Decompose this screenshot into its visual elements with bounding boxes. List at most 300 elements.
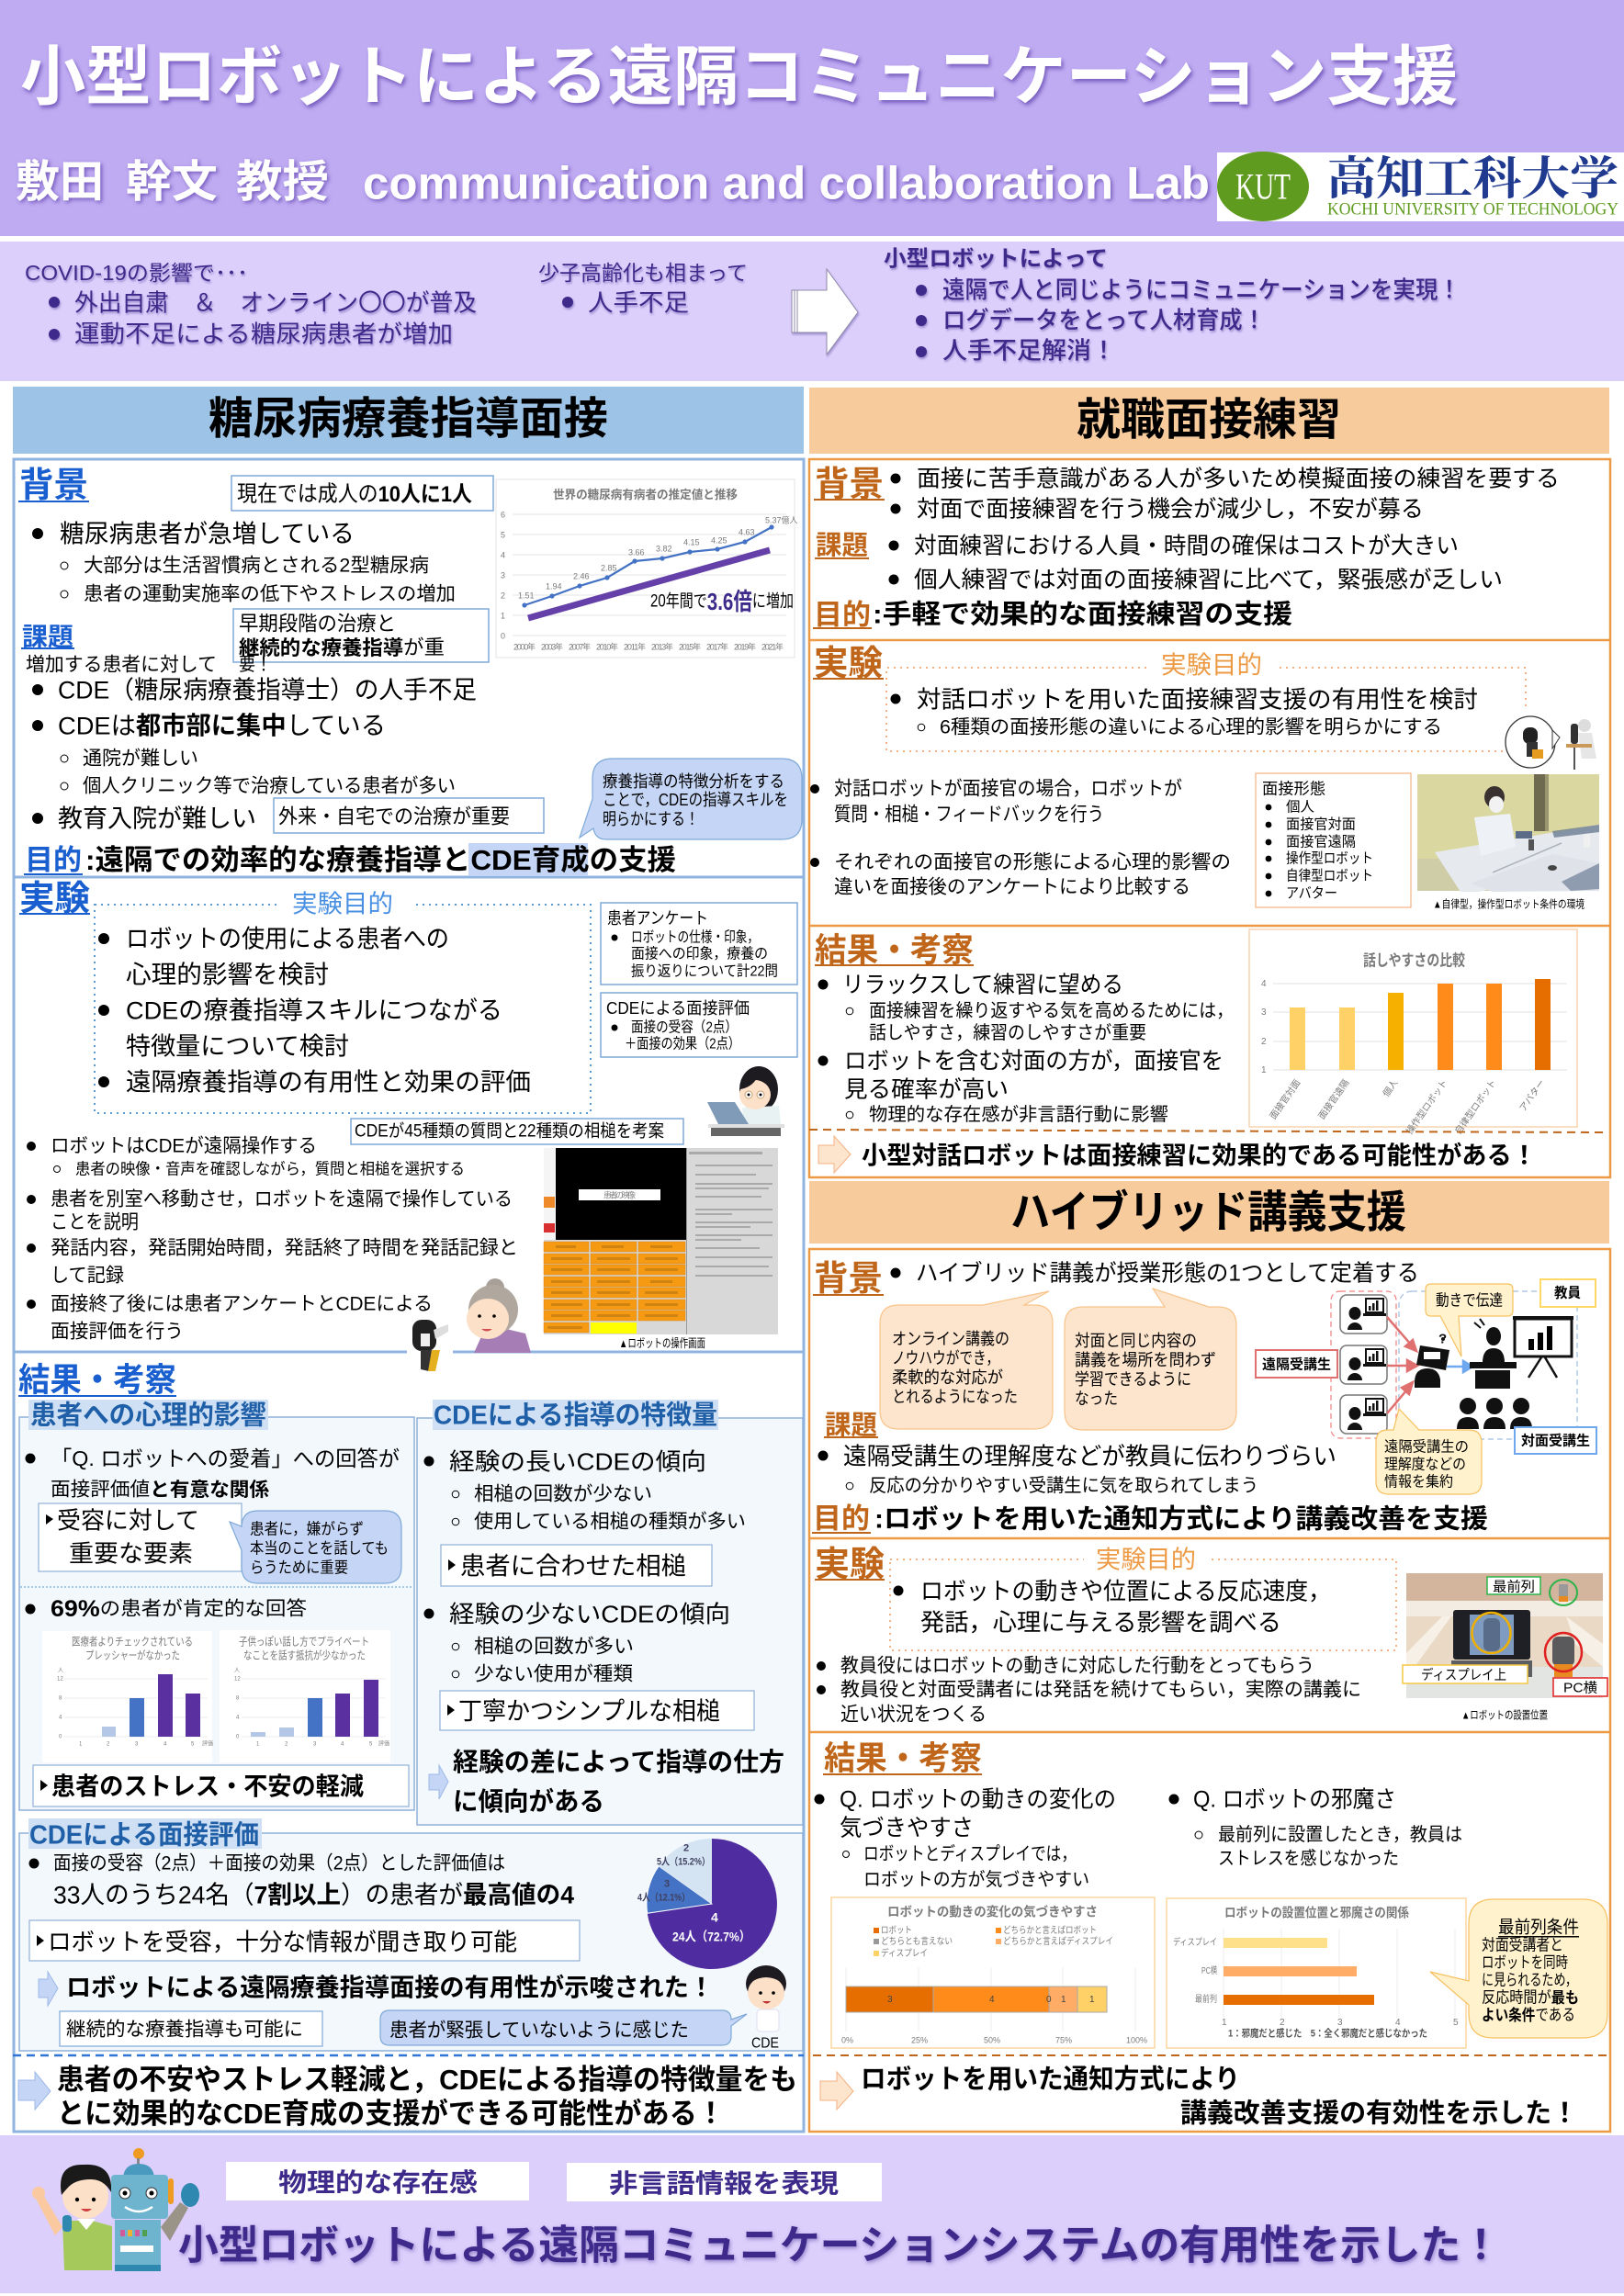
line chart: diabetes patients worldwide: 2021年 (761, 641, 784, 651)
bar chart: less resistance: 3 (313, 1741, 317, 1747)
arrow: to solution (792, 269, 858, 355)
label: front row (1487, 1577, 1540, 1594)
speech bubble: honest talk: らうために重要 (250, 1559, 348, 1576)
bar chart: ease of talking: 1 (1261, 1065, 1267, 1075)
background text: aging society: 少子高齢化も相まって (538, 261, 748, 285)
presenter and lab name: 幹文 (126, 158, 218, 207)
objective line: 目的 (25, 844, 82, 876)
result: noticing the change: 気づきやすさ (840, 1815, 974, 1840)
box: patient questionnaire (601, 903, 797, 985)
method bullets (810, 779, 1231, 898)
pie chart: evaluation scores (637, 1839, 777, 1969)
experiment procedure list: ロボットはCDEが遠隔操作する (51, 1136, 317, 1157)
background bullets: 面接に苦手意識がある人が多いため模擬面接の練習を要する (917, 466, 1560, 491)
speech bubble: aggregating understanding: 理解度などの (1384, 1456, 1466, 1472)
stacked bar chart: noticing the change: どちらとも言えない (881, 1936, 953, 1947)
box: patient questionnaire: 患者アンケート (607, 909, 708, 928)
main title: 小型ロボットによる遠隔コミュニケーション支援 (20, 41, 1458, 114)
label: nonverbal information: 非言語情報を表現 (609, 2169, 839, 2198)
stacked bar chart: noticing the change: どちらかと言えばロボット (1003, 1925, 1097, 1936)
evaluation statement: 33人のうち24名（7割以上）の患者が最高値の4 (53, 1881, 574, 1908)
speech bubble: front-row condition: 対面受講者と (1482, 1936, 1563, 1953)
pie chart: evaluation scores: 5人（15.2%） (657, 1856, 710, 1868)
bar chart: no pressure: 人 (58, 1667, 63, 1673)
box: interview forms: 面接官対面 (1286, 816, 1356, 832)
line chart: diabetes patients worldwide: 2003年 (541, 641, 563, 651)
box: polite simple backchannel (440, 1691, 754, 1730)
label: front row: 最前列 (1493, 1579, 1535, 1594)
bar chart: ease of talking: 3 (1261, 1007, 1267, 1018)
line chart: diabetes patients worldwide: 1.94 (546, 581, 562, 591)
stacked bar chart: noticing the change: 100% (1126, 2035, 1147, 2044)
background text: COVID-19 (25, 261, 477, 347)
bar chart: no pressure: 医療者よりチェックされている (72, 1636, 193, 1649)
experiment purpose box: 対話ロボットを用いた面接練習支援の有用性を検討 (917, 685, 1478, 713)
bar chart: less resistance: 子供っぽい話し方でプライベート (239, 1635, 369, 1649)
stacked bar chart: noticing the change: 50% (984, 2035, 1000, 2044)
column header (809, 388, 1609, 454)
bar chart: robot obstruction by position: 5 (1453, 2018, 1459, 2028)
evaluation statement (29, 1853, 574, 1908)
bar chart: robot obstruction by position: 1：邪魔だと感じた 5：全く邪魔だと感じなかった (1228, 2027, 1427, 2040)
presenter and lab name: 敷田 (16, 158, 104, 207)
experiment purpose box: 心理的影響を検討 (126, 961, 329, 988)
subpanel heading: 患者への心理的影響 (30, 1400, 266, 1430)
panel: diabetes guidance interview (13, 387, 804, 2132)
speech bubble: patient not nervous (380, 2010, 747, 2045)
bar chart: less resistance: 人 (234, 1667, 240, 1673)
box: patient questionnaire: 面接への印象，療養の (631, 945, 768, 962)
subpanel heading: CDEによる面接評価 (29, 1819, 259, 1850)
box: CDE interview evaluation: ＋面接の効果（2点） (625, 1035, 740, 1052)
line chart: diabetes patients worldwide: 2.85 (601, 563, 617, 572)
pie chart: evaluation scores: 24人（72.7%） (672, 1930, 750, 1944)
pie chart: evaluation scores: 4 (711, 1910, 718, 1925)
issues bullets: 反応の分かりやすい受講生に気を取られてしまう (869, 1475, 1258, 1496)
background bullet: ハイブリッド講義が授業形態の1つとして定着する (916, 1260, 1419, 1286)
box: CDE interview evaluation (601, 993, 797, 1057)
result: robot obstruction: 最前列に設置したとき，教員は (1218, 1824, 1462, 1845)
speech bubble: front-row condition: 最前列条件 (1498, 1917, 1579, 1937)
line chart: diabetes patients worldwide: 2 (501, 591, 505, 600)
line chart: diabetes patients worldwide: 3 (501, 570, 505, 580)
speech bubble: front-row condition: よい条件である (1482, 2005, 1575, 2023)
less-experienced CDE tendencies (424, 1600, 730, 1685)
experiment purpose box: ロボットの使用による患者への (126, 925, 449, 952)
pie chart: evaluation scores: 3 (664, 1879, 670, 1890)
icon: remote student 2 (1340, 1345, 1387, 1384)
bar chart: no pressure: 12 (57, 1676, 63, 1682)
speech bubble: honest talk: 本当のことを話しても (250, 1539, 389, 1557)
bar chart: no pressure: 評価 (202, 1739, 213, 1747)
label: remote students: 遠隔受講生 (1262, 1356, 1331, 1372)
background text: COVID-19: 外出自粛 ＆ オンライン〇〇が普及 (74, 288, 477, 316)
column header (13, 387, 804, 454)
caption: operation screen: ▲ロボットの操作画面 (619, 1336, 705, 1350)
box: interview forms: アバター (1286, 884, 1337, 901)
box: continued guidance possible: 継続的な療養指導も可能に (66, 2020, 303, 2041)
operation screen mock: 患者の映像 (603, 1189, 636, 1199)
column header: 糖尿病療養指導面接 (209, 395, 608, 444)
bar chart: ease of talking: 4 (1261, 979, 1267, 989)
issues bullets: 教育入院が難しい (58, 805, 256, 832)
box: stress reduction: 患者のストレス・不安の軽減 (51, 1773, 364, 1800)
overall conclusion text: 患者の不安やストレス軽減と，CDEによる指導の特徴量をも (57, 2064, 797, 2096)
illustration: CDE (746, 1965, 786, 2051)
background bullets (32, 520, 456, 605)
arrow: robot to teacher (1447, 1361, 1472, 1372)
objective line: 目的 (814, 599, 871, 631)
speech bubble: same content anywhere: 対面と同じ内容の (1075, 1332, 1197, 1350)
bar chart: no pressure: 1 (79, 1741, 83, 1747)
results bullets: 面接練習を繰り返すやる気を高めるためには， (869, 1000, 1234, 1021)
speech bubble: online know-how: ノウハウができ， (892, 1349, 999, 1367)
bar chart: robot obstruction by position: 1 (1222, 2018, 1227, 2028)
line chart: diabetes patients worldwide: 2010年 (596, 641, 618, 651)
speech bubble: online know-how (880, 1291, 1053, 1429)
issues bullets (26, 655, 477, 832)
subpanel: psychological effect (19, 1400, 414, 1810)
issues bullets (818, 1442, 1336, 1496)
bar chart: ease of talking: 操作型ロボット (1404, 1077, 1450, 1136)
attachment finding: 「Q. ロボットへの愛着」への回答が (51, 1446, 400, 1470)
issues bullets: 個人練習では対面の面接練習に比べて，緊張感が乏しい (914, 567, 1503, 592)
label: on display (1403, 1665, 1528, 1683)
line chart: diabetes patients worldwide: 6 (501, 510, 505, 519)
bar chart: robot obstruction by position: ロボットの設置位置と邪魔さの関係 (1224, 1906, 1409, 1920)
objective line: :ロボットを用いた通知方式により講義改善を支援 (874, 1503, 1488, 1534)
label: remote students (1256, 1350, 1337, 1378)
attachment finding: 面接評価値と有意な関係 (51, 1480, 269, 1501)
bar chart: ease of talking: 話しやすさの比較 (1363, 951, 1465, 969)
method bullets: それぞれの面接官の形態による心理的影響の (834, 852, 1231, 873)
arrow: implication (39, 1972, 58, 2006)
pie chart: evaluation scores: 2 (683, 1843, 689, 1854)
attachment finding (26, 1446, 400, 1501)
line chart: diabetes patients worldwide: 3.82 (656, 544, 672, 553)
bar chart: ease of talking: 個人 (1380, 1077, 1401, 1099)
issues bullets: CDEは都市部に集中している (58, 712, 386, 739)
line chart: diabetes patients worldwide: 2011年 (624, 641, 646, 651)
stacked bar chart: noticing the change: 1 (1089, 1995, 1095, 2005)
illustration: small robot (412, 1320, 448, 1371)
conclusion text: 講義改善支援の有効性を示した！ (1180, 2098, 1578, 2128)
box: acceptance matter: 受容に対して (57, 1506, 199, 1534)
bar chart: robot obstruction by position: 最前列 (1195, 1993, 1217, 2005)
photo: interview room (1417, 774, 1599, 892)
objective line: :遠隔での効率的な療養指導とCDE育成の支援 (85, 844, 676, 876)
stacked bar chart: noticing the change (831, 1897, 1155, 2048)
line chart: diabetes patients worldwide: 2013年 (651, 641, 673, 651)
speech bubble: feature analysis: ことで，CDEの指導スキルを (603, 791, 788, 809)
university logo: 高知工科大学 (1327, 141, 1618, 208)
bar chart: less resistance: 4 (341, 1741, 344, 1747)
university logo: KUT (1235, 165, 1291, 208)
panel: job interview practice (809, 388, 1610, 1177)
bar chart: less resistance: 5 (369, 1741, 373, 1747)
line chart: diabetes patients worldwide: 3.66 (628, 547, 645, 557)
line chart: diabetes patients worldwide: 2017年 (706, 641, 728, 651)
bar chart: robot obstruction by position: 3 (1337, 2018, 1343, 2028)
university logo (1217, 141, 1624, 221)
background bullets: 大部分は生活習慣病とされる2型糖尿病 (84, 556, 429, 577)
solution text: 人手不足解消！ (942, 336, 1116, 364)
icon: presentation screen (1513, 1316, 1573, 1378)
solution text: ログデータをとって人材育成！ (942, 306, 1266, 333)
heading: issues: 課題 (22, 623, 73, 651)
speech bubble: same content anywhere (1065, 1289, 1236, 1430)
experiment procedure list: 患者を別室へ移動させ，ロボットを遠隔で操作している (51, 1189, 513, 1210)
speech bubble: front-row condition (1430, 1899, 1607, 2038)
experiment procedure list: 面接終了後には患者アンケートとCDEによる (51, 1294, 433, 1315)
result: robot obstruction (1168, 1786, 1462, 1869)
label: physical presence: 物理的な存在感 (278, 2168, 478, 2197)
background bullets: 対面で面接練習を行う機会が減少し，不安が募る (917, 496, 1424, 522)
bar chart: less resistance (220, 1630, 390, 1762)
callout box: continued guidance: 継続的な療養指導が重 (239, 636, 445, 659)
callout box: continued guidance (233, 609, 489, 675)
bar chart: less resistance: 12 (234, 1676, 241, 1682)
speech bubble: aggregating understanding: 情報を集約 (1384, 1473, 1453, 1490)
evaluation statement: 面接の受容（2点）＋面接の効果（2点）とした評価値は (53, 1853, 505, 1874)
heading: issues: 課題 (825, 1411, 877, 1440)
box: interview forms: 面接形態 (1262, 780, 1325, 797)
bar chart: no pressure: プレッシャーがなかった (85, 1649, 180, 1662)
implication text: ロボットによる遠隔療養指導面接の有用性が示唆された！ (66, 1973, 714, 2001)
callout box: outpatient care: 外来・自宅での治療が重要 (278, 805, 510, 828)
bar chart: less resistance: 0 (236, 1734, 240, 1739)
less-experienced CDE tendencies: 経験の少ないCDEの傾向 (449, 1600, 730, 1627)
objective line: 目的 (813, 1503, 870, 1535)
illustration: CDE at laptop (707, 1066, 784, 1136)
label: physical presence (226, 2162, 529, 2200)
positive response statement: 69%の患者が肯定的な回答 (51, 1596, 307, 1622)
box: interview forms: 自律型ロボット (1286, 867, 1373, 884)
experiment procedure list: 面接評価を行う (51, 1322, 184, 1343)
speech bubble: front-row condition: 反応時間が最も (1482, 1988, 1579, 2006)
issues bullets (889, 533, 1503, 592)
solution text: 遠隔で人と同じようにコミュニケーションを実現！ (942, 276, 1460, 303)
box: interview forms (1256, 773, 1411, 907)
less-experienced CDE tendencies: 相槌の回数が多い (474, 1637, 634, 1658)
speech bubble: front-row condition: に見られるため， (1482, 1971, 1577, 1988)
experiment purpose box: 実験目的 (292, 890, 393, 917)
bar chart: less resistance: なことを話す抵抗が少なかった (243, 1649, 366, 1662)
icon: robot: ? (1438, 1331, 1447, 1346)
label: nonverbal information (567, 2163, 882, 2201)
line chart: diabetes patients worldwide: 1.51 (518, 591, 535, 600)
arrow: conclusion (429, 1765, 448, 1799)
subpanel heading: CDEによる指導の特徴量 (434, 1400, 717, 1430)
bar chart: no pressure: 4 (59, 1715, 62, 1720)
column header: 就職面接練習 (1077, 396, 1341, 445)
box: interview forms: 操作型ロボット (1286, 850, 1373, 866)
caption: robot placement: ▲ロボットの設置位置 (1461, 1709, 1548, 1722)
method bullets: 質問・相槌・フィードバックを行う (834, 805, 1104, 826)
background text: aging society (538, 261, 748, 316)
callout box: one in ten adults (231, 476, 493, 511)
results bullets (818, 972, 1234, 1125)
speech bubble: online know-how: とれるようになった (892, 1388, 1018, 1406)
intro band (0, 242, 1624, 381)
stacked bar chart: noticing the change: 25% (911, 2035, 928, 2044)
speech bubble: online know-how: 柔軟的な対応が (892, 1368, 1003, 1387)
issues bullets: 増加する患者に対して (26, 655, 217, 676)
illustration: boy and robot (32, 2148, 199, 2271)
bar chart: less resistance: 1 (256, 1741, 260, 1747)
conclusion text: 小型対話ロボットは面接練習に効果的である可能性がある！ (862, 1141, 1537, 1169)
line chart: diabetes patients worldwide: 2.46 (573, 571, 590, 580)
heading: background: 背景 (815, 466, 884, 504)
solution text (884, 247, 1460, 364)
result: noticing the change (814, 1786, 1116, 1890)
experiment procedure list (27, 1136, 518, 1343)
bar chart: robot obstruction by position: 2 (1280, 2018, 1285, 2028)
illustration: CDE: CDE (751, 2035, 779, 2051)
bar chart: robot obstruction by position: ディスプレイ (1173, 1936, 1217, 1948)
speech bubble: conveyed by motion: 動きで伝達 (1436, 1291, 1503, 1309)
experienced CDE tendencies: 相槌の回数が少ない (474, 1484, 652, 1505)
callout box: continued guidance: 要！ (239, 655, 272, 675)
illustration: robot interviewer (1506, 716, 1596, 770)
conclusion text: ロボットを用いた通知方式により (861, 2064, 1240, 2094)
speech bubble: feature analysis (580, 759, 802, 839)
method bullets: 近い状況をつくる (840, 1705, 987, 1726)
background bullets: 糖尿病患者が急増している (60, 520, 355, 547)
bar chart: ease of talking: 面接官遠隔 (1315, 1077, 1352, 1121)
box: accepted the robot: ロボットを受容，十分な情報が聞き取り可能 (48, 1928, 517, 1955)
background bullets (891, 466, 1560, 522)
bar chart: robot obstruction by position: 4 (1395, 2018, 1401, 2028)
stacked bar chart: noticing the change: 4 (989, 1995, 995, 2005)
stacked bar chart: noticing the change: ロボットの動きの変化の気づきやすさ (887, 1905, 1098, 1919)
bar chart: no pressure: 3 (135, 1741, 139, 1747)
bar chart: no pressure: 8 (59, 1695, 62, 1701)
arrow: conclusion (818, 1136, 851, 1173)
line chart: diabetes patients worldwide: 5 (501, 530, 505, 539)
label: in-person students: 対面受講生 (1521, 1432, 1590, 1448)
overall conclusion text: とに効果的なCDE育成の支援ができる可能性がある！ (57, 2098, 725, 2130)
speech bubble: same content anywhere: 講義を場所を問わず (1075, 1351, 1216, 1369)
subpanel: CDE guidance features (417, 1400, 803, 1825)
box: continued guidance possible (60, 2011, 322, 2046)
box: CDE interview evaluation: CDEによる面接評価 (606, 999, 750, 1018)
bar chart: ease of talking: 2 (1261, 1037, 1267, 1047)
objective line: :手軽で効果的な面接練習の支援 (873, 599, 1292, 629)
label: in-person students (1515, 1427, 1596, 1454)
speech bubble: honest talk: 患者に，嫌がらず (250, 1520, 364, 1537)
conclusion text: 経験の差によって指導の仕方 (453, 1748, 784, 1776)
speech bubble: patient not nervous: 患者が緊張していないように感じた (389, 2020, 689, 2042)
bar chart: ease of talking (1249, 929, 1577, 1136)
bar chart: no pressure: 4 (164, 1741, 167, 1747)
icon: remote student 1 (1340, 1295, 1387, 1334)
column header: ハイブリッド講義支援 (1010, 1188, 1406, 1237)
bar chart: no pressure: 2 (107, 1741, 110, 1747)
heading: issues: 課題 (816, 531, 868, 560)
experiment purpose box (95, 890, 591, 1113)
speech bubble: same content anywhere: 学習できるように (1075, 1370, 1191, 1389)
line chart: diabetes patients worldwide: 4.15 (683, 537, 700, 546)
results bullets: ロボットを含む対面の方が，面接官を (844, 1048, 1224, 1074)
closing statement: 小型ロボットによる遠隔コミュニケーションシステムの有用性を示した！ (178, 2223, 1501, 2268)
background text: aging society: 人手不足 (588, 288, 689, 316)
speech bubble: feature analysis: 療養指導の特徴分析をする (603, 772, 784, 791)
result: noticing the change: Q. ロボットの動きの変化の (840, 1786, 1116, 1812)
experiment purpose box: 実験目的 (1096, 1546, 1196, 1573)
solution text: 小型ロボットによって (884, 247, 1108, 272)
panel: hybrid lecture support (809, 1181, 1610, 2132)
issues bullets: 対面練習における人員・時間の確保はコストが大きい (914, 533, 1459, 558)
hybrid lecture diagram (1256, 1279, 1596, 1494)
heading: results: 結果・考察 (815, 930, 974, 968)
issues bullets: 個人クリニック等で治療している患者が多い (83, 776, 456, 797)
icon: robot (1415, 1331, 1449, 1388)
footer band (0, 2135, 1624, 2293)
result: robot obstruction: ストレスを感じなかった (1218, 1848, 1399, 1869)
presenter and lab name: 教授 (236, 158, 329, 207)
presenter and lab name: communication and collaboration Lab (363, 158, 1210, 209)
conclusion text: に傾向がある (453, 1786, 604, 1816)
photo: robot placement (1403, 1573, 1607, 1698)
stacked bar chart: noticing the change: 3 (887, 1995, 893, 2005)
stacked bar chart: noticing the change: 75% (1055, 2035, 1072, 2044)
heading: experiment: 実験 (815, 1546, 885, 1584)
speech bubble: conveyed by motion (1426, 1284, 1513, 1356)
line chart: diabetes patients worldwide: 5.37億人 (765, 514, 798, 524)
line chart: diabetes patients worldwide: 2007年 (569, 641, 591, 651)
label: on display: ディスプレイ上 (1421, 1666, 1506, 1683)
bar chart: less resistance: 4 (236, 1715, 240, 1720)
stacked bar chart: noticing the change: 1 (1061, 1995, 1066, 2005)
line chart: diabetes patients worldwide: 世界の糖尿病有病者の推定値と推移 (553, 488, 738, 501)
method bullets: 教員役にはロボットの動きに対応した行動をとってもらう (840, 1656, 1314, 1677)
box: questions and backchannels: CDEが45種類の質問と22種類の相槌を考案 (355, 1120, 664, 1141)
background bullets: 患者の運動実施率の低下やストレスの増加 (84, 584, 456, 605)
stacked bar chart: noticing the change: ディスプレイ (881, 1947, 928, 1959)
bar chart: less resistance: 8 (236, 1695, 240, 1701)
experiment procedure list: 患者の映像・音声を確認しながら，質問と相槌を選択する (75, 1160, 465, 1177)
issues bullets: CDE（糖尿病療養指導士）の人手不足 (58, 676, 477, 703)
line chart: diabetes patients worldwide: 2019年 (734, 641, 756, 651)
heading: experiment: 実験 (19, 880, 90, 918)
stacked bar chart: noticing the change: ロボット (881, 1925, 912, 1936)
line chart: diabetes patients worldwide: 20年間で3.6倍に増加 (650, 588, 794, 615)
issues bullets: 遠隔受講生の理解度などが教員に伝わりづらい (843, 1442, 1336, 1469)
label: next to PC: PC横 (1563, 1680, 1597, 1695)
result: noticing the change: ロボットの方が気づきやすい (863, 1869, 1089, 1890)
stacked bar chart: noticing the change: どちらかと言えばディスプレイ (1003, 1935, 1113, 1947)
icon: remote student 3 (1340, 1395, 1387, 1434)
speech bubble: online know-how: オンライン講義の (892, 1330, 1009, 1348)
box: stress reduction (33, 1765, 409, 1806)
box: patient questionnaire: 振り返りについて計22問 (631, 962, 778, 979)
experiment purpose box: 実験目的 (1161, 651, 1262, 679)
heading: results: 結果・考察 (824, 1739, 982, 1776)
speech bubble: honest talk (230, 1511, 401, 1583)
speech bubble: aggregating understanding (1376, 1409, 1482, 1494)
speech bubble: front-row condition: ロボットを同時 (1482, 1953, 1568, 1971)
background text: COVID-19: COVID-19の影響で･･･ (25, 261, 248, 285)
bar chart: robot obstruction by position (1167, 1898, 1466, 2048)
bar chart: robot obstruction by position: PC横 (1201, 1964, 1217, 1976)
heading: experiment: 実験 (814, 645, 883, 683)
stacked bar chart: noticing the change: 0% (841, 2035, 853, 2044)
pie chart: evaluation scores: 4人（12.1%） (637, 1892, 690, 1904)
heading: background: 背景 (814, 1260, 883, 1299)
box: acceptance matter: 重要な要素 (69, 1539, 193, 1567)
box: CDE interview evaluation: 面接の受容（2点） (631, 1019, 738, 1035)
